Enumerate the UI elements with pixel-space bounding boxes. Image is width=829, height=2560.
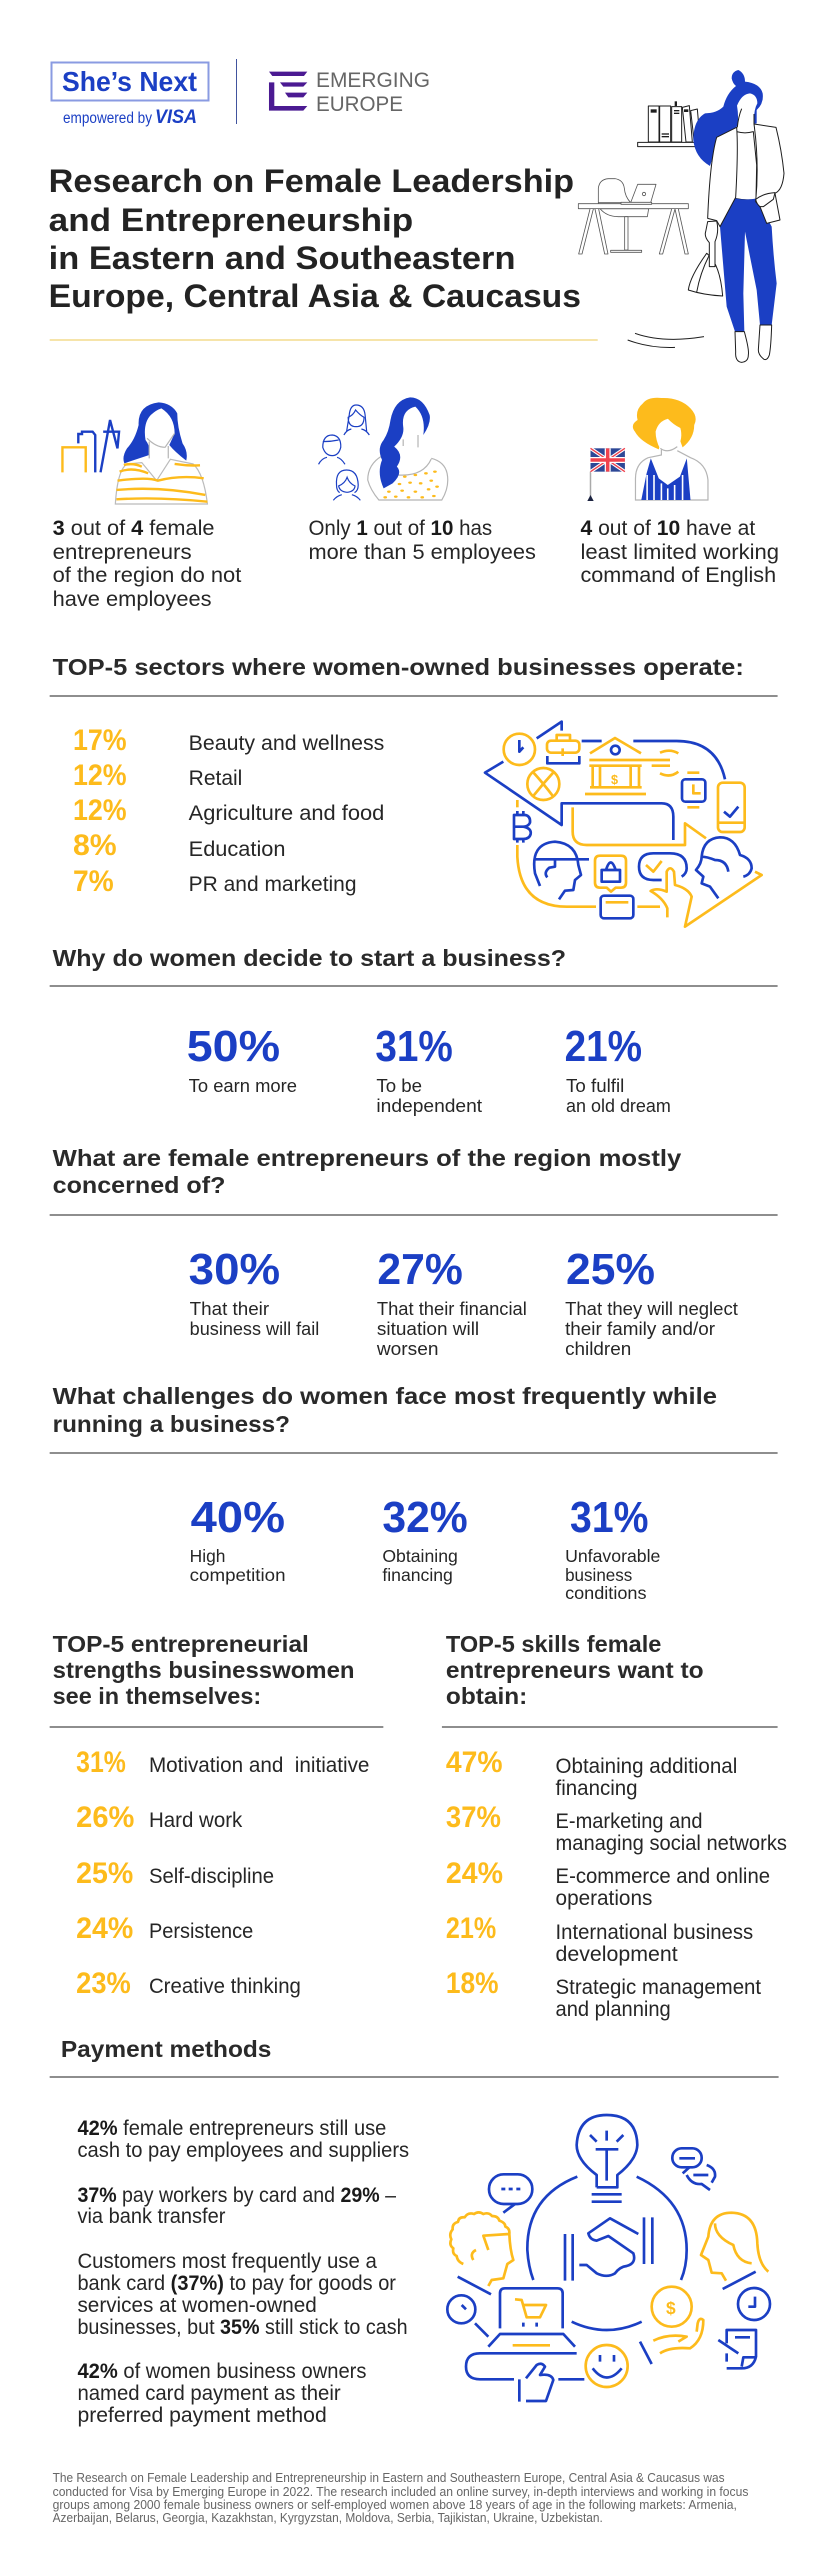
list: top-5 skills: financing (556, 1777, 638, 1800)
footnote (53, 2470, 748, 2525)
heading: top-5 skills: obtain: (446, 1683, 527, 1709)
icon: shopping tag (595, 856, 626, 892)
stat group: concerns: worsen (376, 1338, 438, 1359)
heading: top-5 strengths: TOP-5 entrepreneurial (53, 1631, 309, 1657)
footnote: The Research on Female Leadership and Entrepreneurship in Eastern and Southeastern Europe, Central Asia & Caucasus was (53, 2470, 725, 2485)
icon: bank: $ (611, 773, 618, 787)
list: top-5 sectors: 12% (73, 759, 127, 792)
list: top-5 skills: and planning (556, 1998, 671, 2021)
list: top-5 strengths: 25% (76, 1857, 133, 1890)
stat text: entrepreneurs (53, 541, 192, 564)
list: top-5 sectors: Retail (189, 767, 242, 790)
stat group: concerns: 25% (566, 1245, 655, 1294)
text block: payment methods: Customers most frequently use a (77, 2250, 377, 2273)
stat panel: 1 out of 10 (308, 397, 536, 564)
text block: payment methods: bank card (37%) to pay for goods or (77, 2272, 396, 2295)
list: top-5 strengths (76, 1746, 369, 2000)
icon: shirt (735, 132, 757, 200)
text block: payment methods (77, 2117, 409, 2427)
icon: watch (682, 773, 705, 807)
list: top-5 skills: 47% (446, 1746, 503, 1779)
list: top-5 sectors: 17% (73, 724, 127, 757)
illustration: payment and partnership icons (447, 2115, 770, 2402)
stat text (308, 517, 536, 564)
list: top-5 skills: operations (556, 1887, 652, 1910)
footnote: groups among 2000 female business owners or self-employed women above 18 years of age in the following markets: Armenia, (53, 2497, 737, 2512)
icon: left head with curly hair (450, 2212, 513, 2286)
heading: top-5 skills: entrepreneurs want to (446, 1657, 704, 1683)
icon: face and neck (737, 93, 757, 133)
list: top-5 skills: E-commerce and online (556, 1865, 770, 1888)
stat group: concerns: business will fail (190, 1318, 319, 1339)
stat group: reasons to start a business: To be (376, 1075, 422, 1096)
icon: circle arcs (527, 2177, 687, 2330)
stat text: more than 5 employees (308, 541, 536, 564)
stat group: challenges: conditions (565, 1583, 647, 1603)
title: in Eastern and Southeastern (49, 240, 515, 276)
list: top-5 sectors: 8% (73, 829, 117, 862)
stat group: concerns (189, 1245, 738, 1359)
title: Research on Female Leadership (49, 163, 574, 199)
logo: She's Next empowered by Visa: She’s Next (62, 66, 197, 97)
stat group: concerns: children (565, 1338, 631, 1359)
stat group: concerns: 30% (189, 1245, 280, 1294)
illustration: businesswoman with desk and bookshelf (578, 70, 784, 362)
title (49, 163, 581, 314)
text block: payment methods: businesses, but 35% still stick to cash (77, 2316, 408, 2339)
list: top-5 strengths: Motivation and initiative (149, 1754, 369, 1777)
list: top-5 skills: 37% (446, 1801, 501, 1834)
list: top-5 strengths: 23% (76, 1967, 131, 2000)
main content: statistics and lists (50, 397, 787, 2525)
logo: Emerging Europe (269, 68, 430, 116)
text block: payment methods: cash to pay employees and suppliers (77, 2139, 409, 2162)
stat group: concerns: their family and/or (565, 1318, 715, 1339)
icon: smiley (586, 2345, 628, 2387)
icon: handshake (565, 2217, 652, 2281)
list: top-5 sectors: Beauty and wellness (189, 732, 384, 755)
text block: payment methods: named card payment as their (77, 2382, 341, 2405)
list: top-5 sectors: PR and marketing (189, 873, 357, 896)
stat group: reasons to start a business: 50% (187, 1022, 280, 1071)
heading: top-5 strengths (53, 1631, 355, 1709)
icon: right head (701, 2213, 768, 2281)
icon: laptop with cart (466, 2288, 577, 2379)
logo: She's Next empowered by Visa (52, 62, 208, 128)
icon: briefcase (547, 735, 579, 763)
text block: payment methods: 42% of women business owners (77, 2360, 366, 2383)
icon: right clock (738, 2288, 770, 2320)
stat text: least limited working (580, 541, 779, 564)
icon: hair (693, 70, 763, 166)
list: top-5 strengths: Creative thinking (149, 1975, 301, 1998)
icon: bitcoin (514, 800, 531, 843)
stat group: challenges: 32% (382, 1493, 468, 1542)
logo: Emerging Europe: EMERGING (316, 68, 430, 92)
icon: left speech bubble (489, 2174, 532, 2213)
list: top-5 skills: managing social networks (556, 1832, 787, 1855)
logo: Emerging Europe: EUROPE (316, 92, 403, 116)
icon: document (718, 2330, 756, 2368)
stat group: challenges: competition (190, 1565, 286, 1585)
stat group: concerns: That their financial (377, 1298, 527, 1319)
icon: approval button and pointing hand (639, 853, 762, 927)
stat group: challenges: 31% (570, 1493, 648, 1542)
icon: clock (504, 734, 535, 765)
icon: woman with three small heads (319, 397, 448, 500)
icon: bank (585, 738, 678, 794)
stat text: have employees (53, 588, 212, 611)
icon: credit card (601, 896, 633, 918)
list: top-5 skills: E-marketing and (556, 1810, 703, 1833)
stat group: challenges: Unfavorable (565, 1546, 660, 1566)
stat text: 3 out of 4 female (53, 517, 215, 540)
list: top-5 skills (446, 1746, 787, 2021)
stat group: reasons to start a business: 21% (565, 1022, 642, 1071)
icon: motion lines (628, 333, 704, 347)
title: Europe, Central Asia & Caucasus (49, 278, 581, 314)
stat group: challenges: Obtaining (382, 1546, 458, 1566)
stat group: concerns: situation will (377, 1318, 479, 1339)
icon: magnifier (447, 2295, 488, 2337)
text block: payment methods: 42% female entrepreneurs still use (77, 2117, 386, 2140)
illustration: business and finance icons (485, 722, 762, 927)
list: top-5 sectors: Education (189, 838, 286, 861)
list: top-5 sectors (73, 724, 384, 898)
icon: desk, chair and laptop (578, 179, 688, 254)
stat group: concerns: That their (190, 1298, 269, 1319)
list: top-5 strengths: Hard work (149, 1809, 243, 1832)
arrow: blue outline (485, 722, 725, 840)
icon: coin and hand (640, 2287, 703, 2364)
icon: trousers (720, 198, 777, 332)
list: top-5 sectors: 7% (73, 865, 114, 898)
stat group: reasons to start a business: 31% (375, 1022, 453, 1071)
list: top-5 strengths: 24% (76, 1912, 133, 1945)
arrow: yellow bottom (517, 845, 660, 907)
list: top-5 sectors: 12% (73, 794, 127, 827)
heading: top-5 strengths: see in themselves: (53, 1683, 261, 1709)
heading: challenges: What challenges do women face most frequently while (53, 1383, 717, 1409)
stat panel: 4 out of 10 (580, 398, 779, 587)
icon: coin and hand: $ (666, 2298, 676, 2318)
heading: concerns (53, 1145, 681, 1198)
list: top-5 sectors: Agriculture and food (189, 802, 384, 825)
text block: payment methods: 37% pay workers by card and 29% – (77, 2184, 396, 2207)
stat text: of the region do not (53, 564, 242, 587)
heading: concerns: concerned of? (53, 1172, 225, 1198)
icon: handbag (688, 253, 723, 296)
stat group: reasons to start a business: To earn more (189, 1075, 297, 1096)
list: top-5 strengths: Self-discipline (149, 1865, 274, 1888)
icon: thumbs up (519, 2364, 584, 2402)
stat group: reasons to start a business: To fulfil (566, 1075, 624, 1096)
list: top-5 skills: Strategic management (556, 1976, 761, 1999)
stat group: challenges: business (565, 1565, 633, 1585)
arrow: yellow centre (573, 807, 706, 845)
heading: top-5 sectors: TOP-5 sectors where women-owned businesses operate: (53, 654, 744, 680)
stat group: concerns: 27% (377, 1245, 463, 1294)
icon: woman with UK flag (587, 398, 708, 501)
stat text: command of English (580, 564, 776, 587)
logo: She's Next empowered by Visa: VISA (155, 107, 197, 128)
heading: why start a business: Why do women decide to start a business? (53, 945, 566, 971)
stat group: reasons to start a business (187, 1022, 671, 1116)
heading: concerns: What are female entrepreneurs of the region mostly (53, 1145, 681, 1171)
icon: phone (718, 783, 745, 832)
list: top-5 skills: 18% (446, 1967, 499, 2000)
stat group: challenges: financing (382, 1565, 453, 1585)
list: top-5 skills: Obtaining additional (556, 1755, 737, 1778)
icon: left head (533, 842, 589, 899)
list: top-5 strengths: 26% (76, 1801, 134, 1834)
logo: She's Next empowered by Visa: empowered by (63, 110, 152, 127)
stat panel: 3 out of 4 (53, 402, 242, 611)
text block: payment methods: services at women-owned (77, 2294, 317, 2317)
stat group: reasons to start a business: an old dream (566, 1095, 671, 1116)
stat group: challenges (190, 1493, 660, 1603)
stat group: challenges: 40% (191, 1493, 285, 1542)
stat text (580, 517, 779, 587)
icon: woman with city skyline (62, 402, 207, 504)
footnote: Azerbaijan, Belarus, Georgia, Kazakhstan, Kyrgyzstan, Moldova, Serbia, Tajikistan, Ukraine, Uzbekistan. (53, 2510, 603, 2525)
footnote: conducted for Visa by Emerging Europe in 2022. The research included an online survey, in-depth interviews and working in focus (53, 2484, 748, 2499)
stat group: reasons to start a business: independent (376, 1095, 482, 1116)
heading: top-5 strengths: strengths businesswomen (53, 1657, 355, 1683)
heading: challenges (53, 1383, 717, 1437)
icon: right speech bubbles (672, 2148, 715, 2190)
stat group: challenges: High (190, 1546, 225, 1566)
text block: payment methods: via bank transfer (77, 2205, 225, 2228)
list: top-5 skills: 24% (446, 1857, 503, 1890)
heading: top-5 skills: TOP-5 skills female (446, 1631, 661, 1657)
icon: right head (696, 837, 752, 898)
heading: top-5 skills (446, 1631, 704, 1709)
icon: jacket (708, 127, 737, 227)
title: and Entrepreneurship (49, 202, 413, 238)
stat text: Only 1 out of 10 has (308, 517, 492, 540)
icon: light bulb (577, 2115, 637, 2202)
list: top-5 skills: 21% (446, 1912, 496, 1945)
icon: shoes (735, 332, 748, 362)
list: top-5 skills: International business (556, 1921, 753, 1944)
list: top-5 strengths: Persistence (149, 1920, 253, 1943)
icon: bookshelf (638, 101, 700, 147)
list: top-5 strengths: 31% (76, 1746, 126, 1779)
heading: challenges: running a business? (53, 1411, 290, 1437)
heading: payment methods: Payment methods (61, 2036, 271, 2062)
stat text (53, 517, 242, 611)
list: top-5 skills: development (556, 1943, 678, 1966)
stat text: 4 out of 10 have at (580, 517, 755, 540)
stat group: concerns: That they will neglect (565, 1298, 738, 1319)
icon: globe (527, 768, 559, 800)
text block: payment methods: preferred payment method (77, 2404, 327, 2427)
